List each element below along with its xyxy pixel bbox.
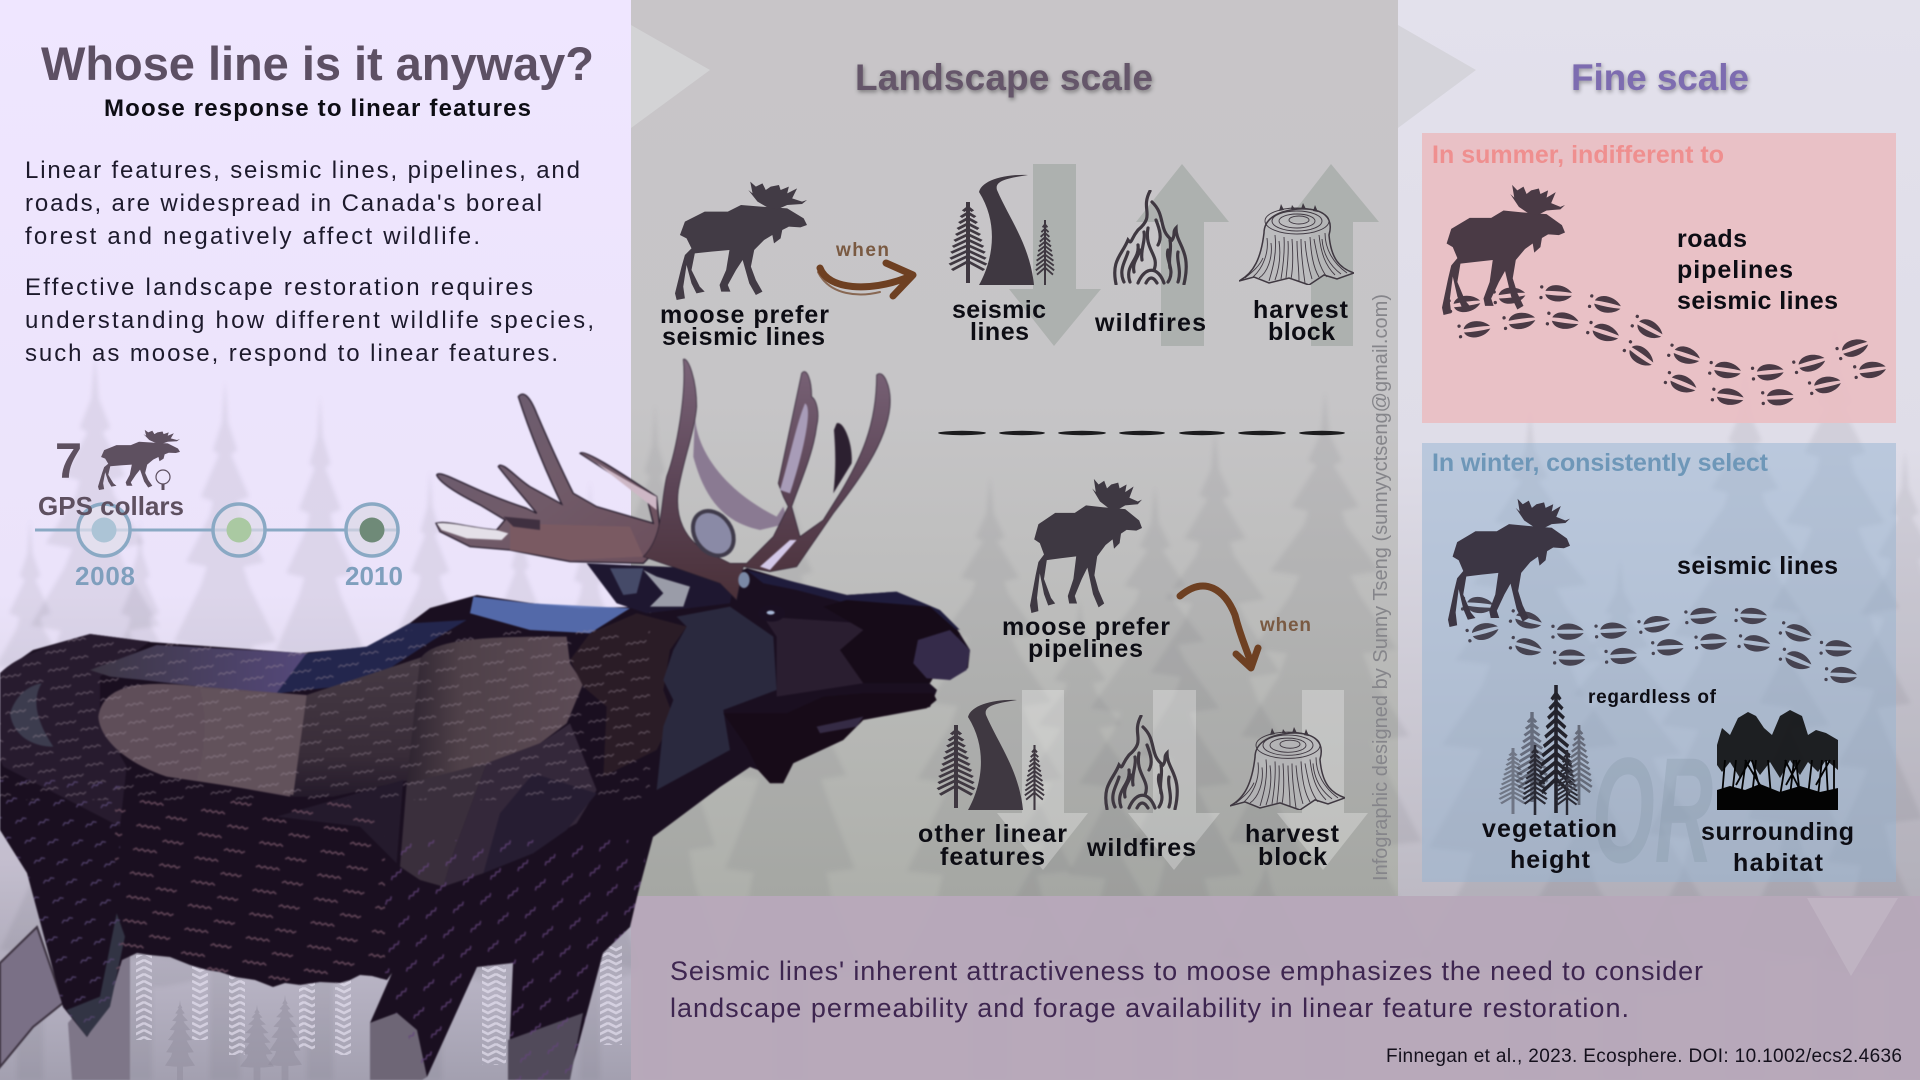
heading: in summer: In summer, indifferent to [1432, 141, 1724, 169]
label: surrounding habitat: surrounding [1701, 818, 1854, 846]
label: moose prefer seismic lines: seismic lines [662, 323, 825, 351]
text block: conclusion: Seismic lines' inherent attractiveness to moose emphasizes the need to consider [670, 956, 1703, 986]
forest backdrop [0, 327, 1920, 1080]
arrow: when, pipelines [1180, 586, 1258, 668]
subtitle: Moose response to linear features [104, 95, 531, 122]
arrow: other linear features decrease [997, 690, 1088, 870]
illustration: large moose [0, 359, 970, 1080]
stat: 7 GPS collars: GPS collars [38, 491, 184, 521]
label: seismic lines: seismic lines [1677, 552, 1838, 580]
icon: moose walking [1448, 499, 1570, 627]
icon: moose prefer pipelines [1030, 479, 1142, 613]
icon: moose walking [1442, 185, 1565, 315]
icon: summer hoof tracks [1447, 284, 1887, 407]
text list: indifferent features: roads [1677, 225, 1747, 253]
divider: dashed seismic line [938, 431, 1345, 435]
text block: intro paragraph 1: roads, are widespread in Canada's boreal [25, 190, 542, 217]
label: other linear features: other linear [918, 820, 1067, 848]
timeline: GPS collars 2008 to 2010: 2008 [75, 561, 135, 591]
label: seismic lines [952, 296, 1046, 346]
stat: 7 GPS collars: 7 [55, 433, 82, 489]
text block: intro paragraph 1: Linear features, seismic lines, pipelines, and [25, 157, 580, 184]
icon: wildfire [1106, 716, 1177, 809]
label: vegetation height: vegetation [1482, 815, 1617, 843]
neck and head coat [470, 570, 970, 790]
icon: surrounding habitat trees [1717, 710, 1838, 810]
panel: landscape scale background [631, 0, 1398, 896]
text block: intro paragraph 2: Effective landscape restoration requires [25, 274, 533, 301]
icon: winter hoof tracks [1461, 595, 1857, 684]
panel: left background [0, 0, 631, 1080]
text block: conclusion: landscape permeability and forage availability in linear feature restoration. [670, 993, 1629, 1023]
label: harvest block: block [1258, 843, 1327, 871]
panel: conclusion band [631, 896, 1920, 1080]
left antler [436, 394, 660, 563]
text block: intro paragraph 2: understanding how different wildlife species, [25, 307, 594, 334]
icon: other linear features [938, 700, 1044, 810]
text block: intro paragraph 1 [25, 157, 580, 250]
far hind leg [0, 927, 63, 1067]
label: surrounding habitat: habitat [1733, 849, 1824, 877]
lower leg highlights [370, 1013, 583, 1080]
citation: Finnegan et al., 2023. Ecosphere. DOI: 10.1002/ecs2.4636 [1386, 1046, 1902, 1067]
stat: 7 GPS collars [38, 430, 184, 521]
arrow: wildfires decrease [1128, 690, 1220, 870]
heading: fine scale: Fine scale [1571, 57, 1749, 98]
icon: seismic line in forest [950, 175, 1054, 285]
label: moose prefer seismic lines: moose prefer [660, 301, 829, 329]
icon: harvest stump [1239, 203, 1354, 285]
label: moose prefer pipelines: pipelines [1028, 635, 1143, 663]
shoulder coat [400, 637, 597, 887]
label: other linear features: features [940, 843, 1045, 871]
icon: moose prefer seismic lines [675, 182, 807, 300]
text list: indifferent features: pipelines [1677, 256, 1793, 284]
panel: fine scale background [1398, 0, 1920, 896]
text block: intro paragraph 2 [25, 274, 594, 367]
icon: wildfire [1115, 191, 1186, 284]
flank and rump coat [0, 620, 467, 1037]
label: seismic lines: lines [970, 318, 1029, 346]
label: wildfires: wildfires [1094, 309, 1206, 337]
moose body [0, 568, 970, 1080]
near hind leg [68, 950, 130, 1080]
mane patch [587, 563, 737, 613]
arrow: chevron down to conclusion [1807, 898, 1898, 976]
label: moose prefer pipelines: moose prefer [1002, 613, 1170, 641]
right antler [643, 359, 890, 600]
panel: winter selection [1422, 443, 1896, 894]
label: moose prefer pipelines [1002, 613, 1170, 663]
arrow: wildfires increase [1136, 164, 1229, 346]
timeline: GPS collars 2008 to 2010: 2010 [345, 561, 403, 591]
arrow: chevron into fine scale [1398, 25, 1476, 128]
arrow: harvest block increase [1286, 164, 1379, 346]
arrow: when, seismic [818, 263, 913, 296]
arrow: chevron into landscape scale [631, 25, 710, 128]
text block: intro paragraph 2: such as moose, respond to linear features. [25, 340, 558, 367]
label: regardless of: regardless of [1588, 687, 1717, 708]
label: moose prefer seismic lines [660, 301, 829, 351]
label: surrounding habitat [1701, 818, 1854, 877]
label: when: when [835, 240, 889, 261]
label: seismic lines: seismic [952, 296, 1046, 324]
credit: vertical designer text: Infographic designed by Sunny Tseng (sunnyyctseng@gmail.com) [1370, 294, 1392, 881]
title: Whose line is it anyway? [41, 37, 594, 90]
label: harvest block [1253, 296, 1349, 346]
label: harvest block: block [1268, 318, 1335, 346]
icon: spruce trees [1499, 685, 1592, 815]
label: wildfires: wildfires [1086, 834, 1196, 862]
background: misty trunks under moose [136, 945, 622, 1080]
watermark: OR: OR [1592, 726, 1713, 894]
text list: indifferent features [1677, 225, 1838, 315]
arrow: seismic lines decrease [1009, 164, 1101, 346]
label: vegetation height [1482, 815, 1617, 874]
timeline: GPS collars 2008 to 2010 [35, 504, 403, 591]
label: harvest block [1245, 820, 1340, 871]
text block: conclusion [670, 956, 1703, 1023]
arrow: harvest block decrease [1277, 690, 1368, 870]
icon: harvest stump [1230, 727, 1345, 810]
text block: intro paragraph 1: forest and negatively affect wildlife. [25, 223, 480, 250]
label: when: when [1259, 615, 1311, 636]
label: harvest block: harvest [1245, 820, 1340, 848]
heading: landscape scale: Landscape scale [855, 57, 1153, 98]
text list: indifferent features: seismic lines [1677, 287, 1838, 315]
label: vegetation height: height [1510, 846, 1591, 874]
label: harvest block: harvest [1253, 296, 1349, 324]
heading: in winter: In winter, consistently select [1432, 449, 1769, 477]
label: other linear features [918, 820, 1067, 871]
panel: summer selection [1422, 133, 1896, 423]
fur texture [0, 630, 650, 1080]
